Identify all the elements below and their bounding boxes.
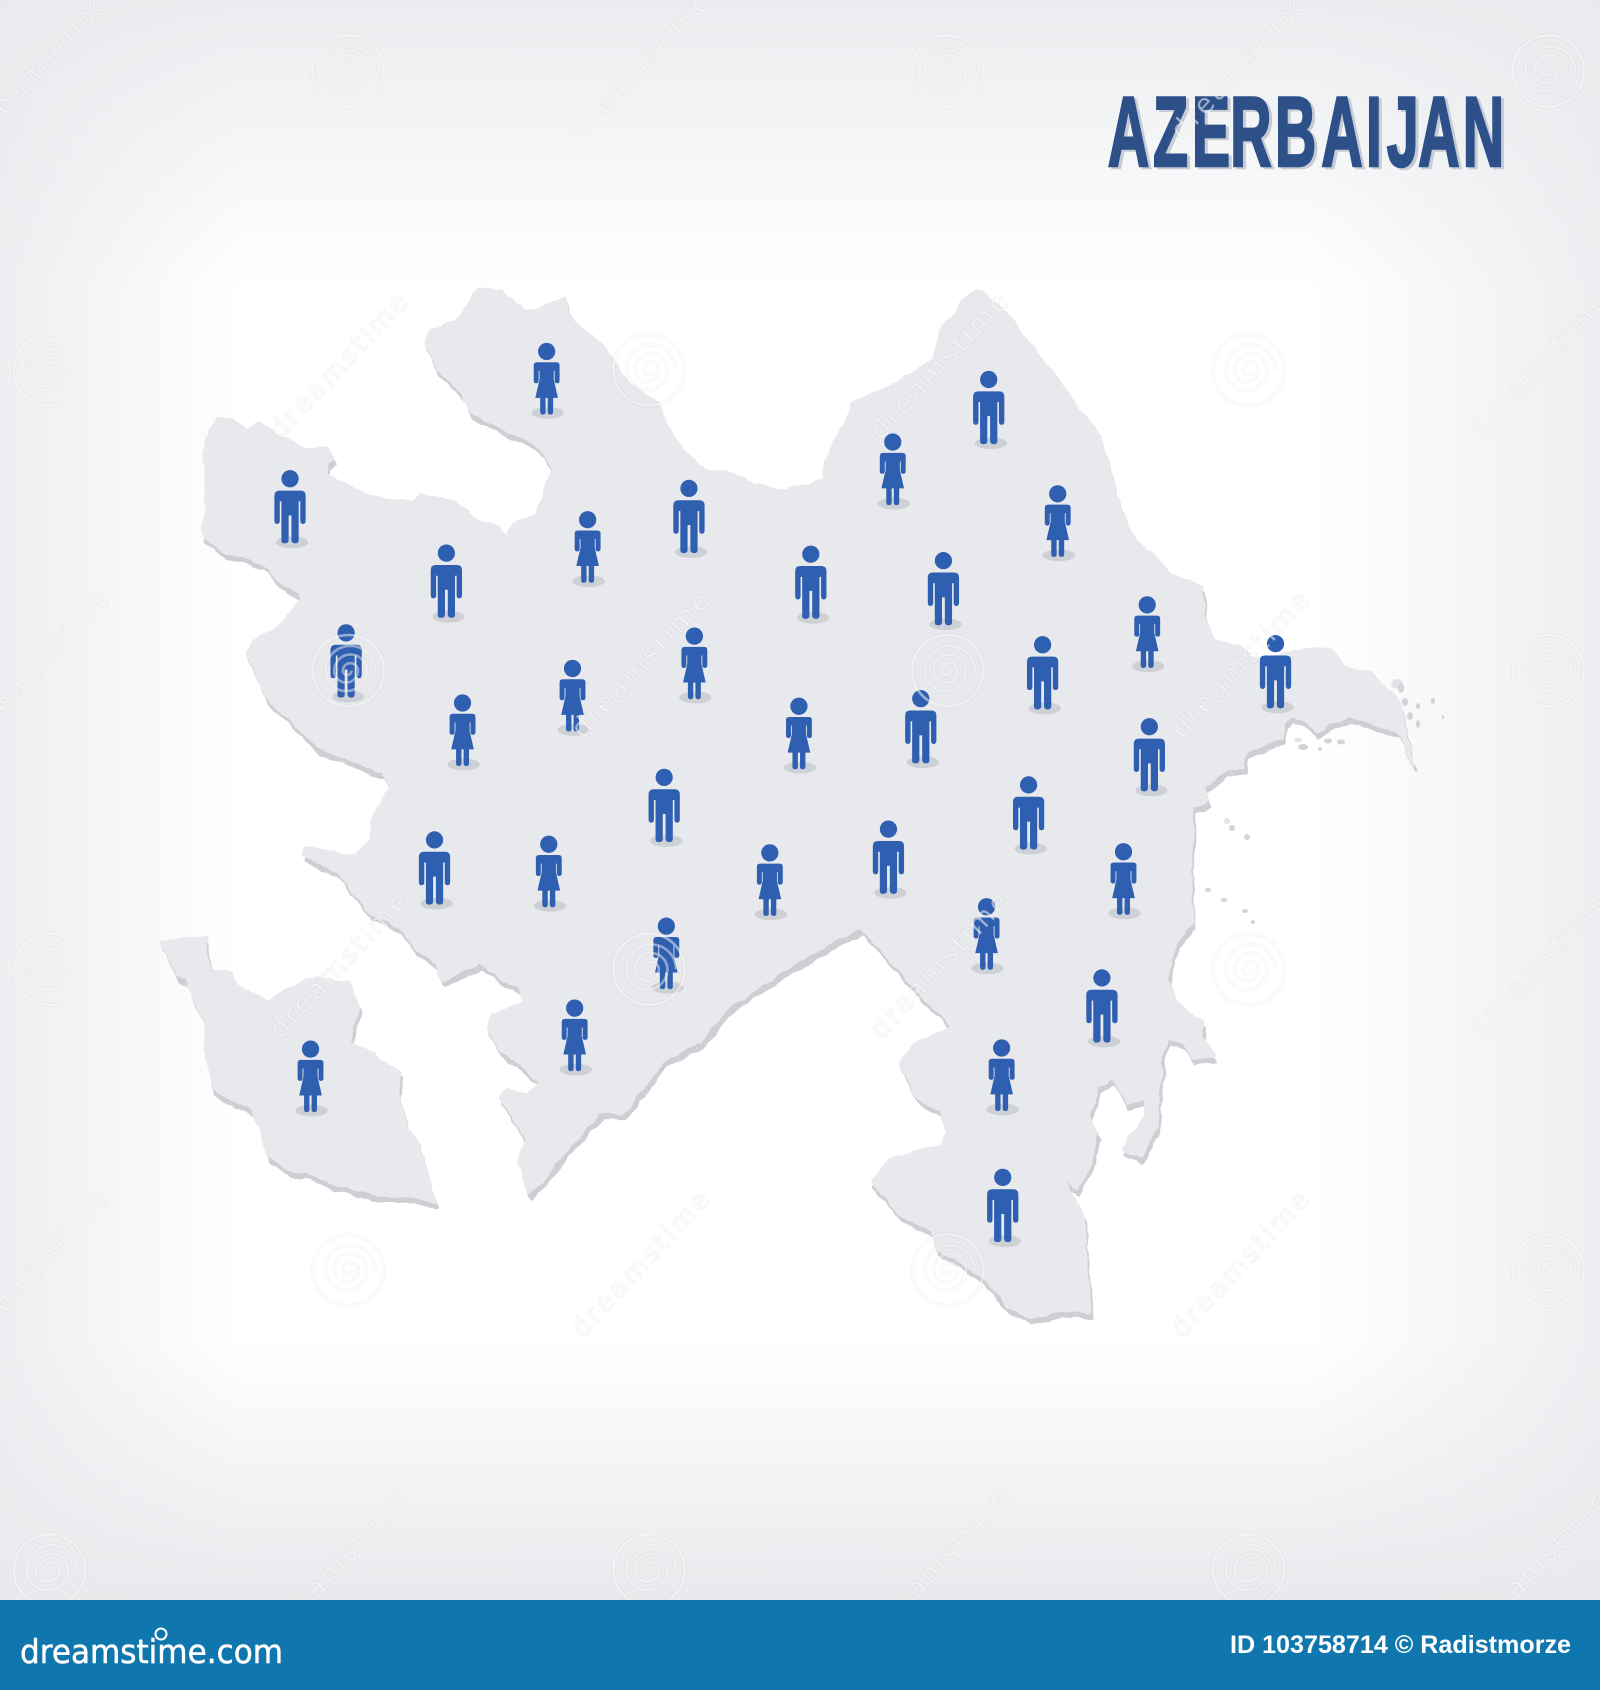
map extruded shadow bbox=[164, 294, 1415, 1324]
watermark layer: dreamstime bbox=[864, 1484, 1015, 1644]
person: man bbox=[649, 769, 683, 847]
watermark layer: dreamstime bbox=[864, 886, 1015, 1045]
person: woman bbox=[557, 660, 590, 736]
watermark layer: dreamstime bbox=[263, 1484, 414, 1644]
watermark layer: dreamstime bbox=[864, 287, 1015, 446]
person: man bbox=[1013, 776, 1047, 854]
watermark layer: dreamstime bbox=[565, 585, 716, 744]
footer bar bbox=[0, 1600, 1600, 1690]
person: woman bbox=[447, 694, 480, 770]
watermark layer: dreamstime bbox=[565, 1185, 716, 1344]
person: woman bbox=[987, 1039, 1019, 1115]
person: man bbox=[973, 371, 1007, 449]
watermark layer: dreamstime bbox=[263, 886, 414, 1045]
person: woman bbox=[755, 844, 787, 920]
map of Azerbaijan bbox=[162, 288, 1415, 1324]
person: man bbox=[330, 624, 364, 702]
person: man bbox=[419, 831, 453, 909]
person: man bbox=[1086, 969, 1120, 1047]
person: woman bbox=[878, 433, 910, 509]
small islands bbox=[1205, 679, 1444, 924]
person: woman bbox=[784, 698, 816, 774]
title: AZERBAIJAN: AZERBAIJAN bbox=[1108, 78, 1504, 188]
person: man bbox=[987, 1169, 1021, 1247]
person: woman bbox=[560, 999, 592, 1076]
people icons bbox=[274, 343, 1294, 1247]
watermark layer: dreamstime bbox=[263, 287, 414, 446]
person: man bbox=[673, 480, 707, 558]
person: man bbox=[1260, 635, 1294, 713]
footer logo: dreamstime.com: dreamstime.com bbox=[20, 1632, 283, 1671]
person: man bbox=[795, 546, 829, 624]
watermark layer: dreamstime bbox=[1165, 1185, 1316, 1344]
person: woman bbox=[573, 511, 605, 587]
map land: main territory bbox=[203, 288, 1413, 1318]
person: man bbox=[928, 552, 962, 630]
person: man bbox=[905, 690, 939, 768]
person: man bbox=[873, 821, 907, 899]
person: man bbox=[1134, 718, 1168, 796]
person: woman bbox=[971, 898, 1004, 974]
person: woman bbox=[1132, 596, 1164, 672]
person: woman bbox=[534, 836, 566, 912]
person: woman bbox=[1108, 843, 1141, 919]
person: woman bbox=[532, 343, 564, 419]
person: man bbox=[274, 470, 308, 548]
person: woman bbox=[295, 1040, 328, 1116]
watermark layer: dreamstime bbox=[1165, 585, 1316, 744]
map land: Nakhchivan exclave bbox=[162, 937, 435, 1202]
person: man bbox=[431, 544, 465, 623]
footer credit: ID 103758714 © Radistmorze bbox=[1230, 1631, 1571, 1659]
person: woman bbox=[679, 628, 712, 704]
person: woman bbox=[651, 918, 684, 994]
title: AZERBAIJAN: AZERBAIJAN bbox=[1111, 80, 1507, 190]
person: woman bbox=[1043, 485, 1075, 561]
person: man bbox=[1027, 636, 1061, 714]
